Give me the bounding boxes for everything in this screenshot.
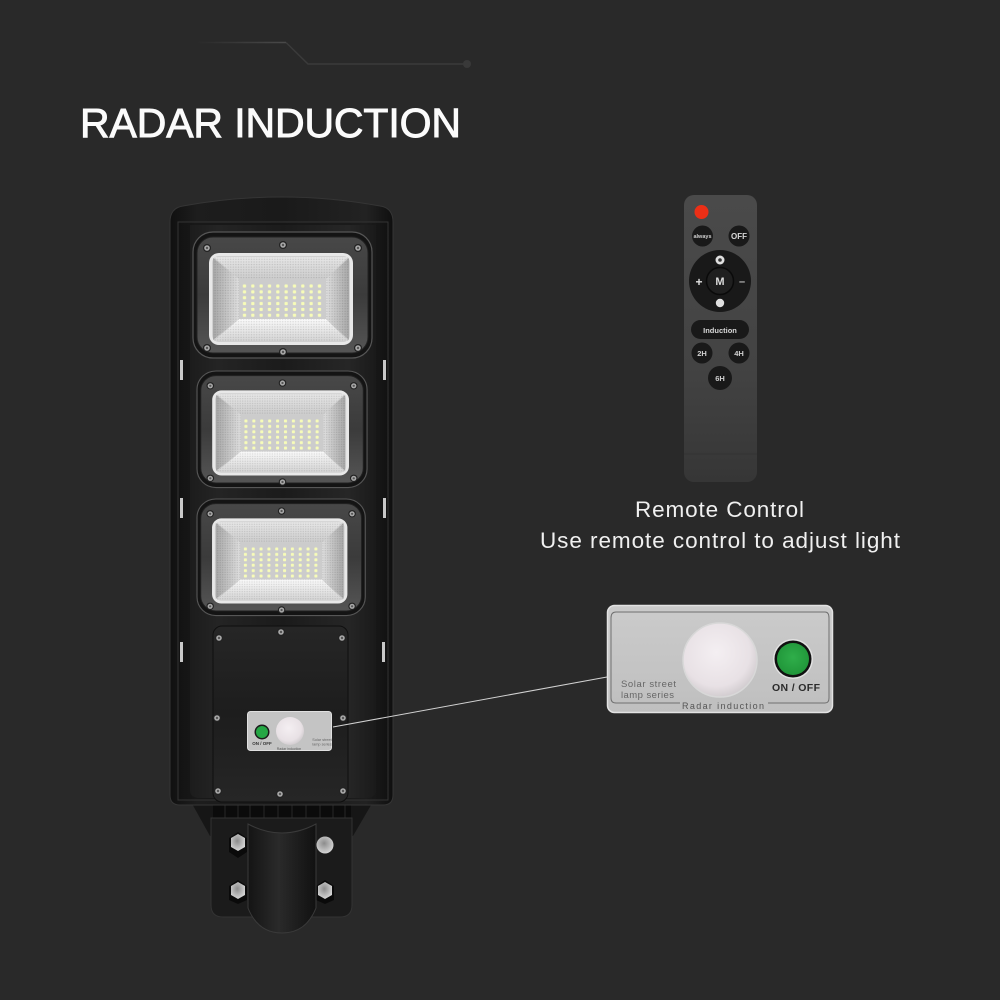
plate [608, 606, 832, 712]
remote control caption: Use remote control to adjust light [540, 528, 901, 553]
off button [728, 226, 750, 246]
bolts [229, 832, 334, 904]
power button [694, 205, 708, 219]
remote control [684, 195, 757, 482]
battery door [213, 626, 348, 802]
direction pad: M [715, 276, 725, 288]
cooling fins [213, 802, 351, 822]
connector line from lamp sensor to close-up [333, 677, 607, 727]
remote body [684, 195, 757, 482]
always button: always [693, 234, 712, 240]
housing inner recess [178, 222, 388, 800]
always button [692, 226, 713, 246]
series label: Solar street [621, 679, 676, 690]
lamp housing [170, 197, 393, 805]
title: RADAR INDUCTION [80, 100, 461, 146]
small sensor label on lamp: lamp series [312, 742, 332, 746]
radar induction label: Radar induction [682, 701, 764, 711]
small sensor label on lamp: Radar induction [277, 747, 301, 751]
4H button [728, 342, 750, 364]
direction pad: + [695, 275, 703, 289]
6H button [708, 366, 732, 390]
off button: OFF [731, 232, 747, 241]
PIR dome [683, 623, 757, 697]
2H button: 2H [697, 349, 707, 358]
housing centre panel [190, 225, 376, 798]
side clips [180, 360, 386, 662]
LED module 1 [193, 232, 372, 358]
direction pad: – [739, 276, 745, 288]
induction button: Induction [703, 326, 737, 335]
small sensor label on lamp: ON / OFF [252, 741, 272, 746]
small sensor label on lamp [248, 712, 333, 751]
lamp neck taper [190, 800, 374, 836]
direction pad [689, 250, 751, 312]
plate border line [611, 612, 829, 703]
decorative header line with node [196, 42, 471, 68]
induction button [691, 320, 749, 339]
on/off label: ON / OFF [772, 682, 821, 694]
LED module 3 [197, 499, 365, 616]
mounting bracket [211, 818, 352, 917]
remote control caption [540, 497, 901, 553]
street lamp product [170, 197, 393, 933]
PIR dome [276, 717, 304, 745]
remote control caption: Remote Control [635, 497, 804, 522]
green switch [254, 724, 270, 740]
small sensor label on lamp: Solar street [312, 738, 333, 742]
series label: lamp series [621, 690, 674, 701]
6H button: 6H [715, 374, 725, 383]
4H button: 4H [734, 349, 744, 358]
2H button [692, 342, 712, 364]
series label [621, 679, 676, 701]
pole clamp [248, 824, 316, 933]
green on/off button [773, 639, 813, 679]
radar sensor close-up panel [608, 606, 832, 712]
LED module 2 [197, 371, 367, 488]
